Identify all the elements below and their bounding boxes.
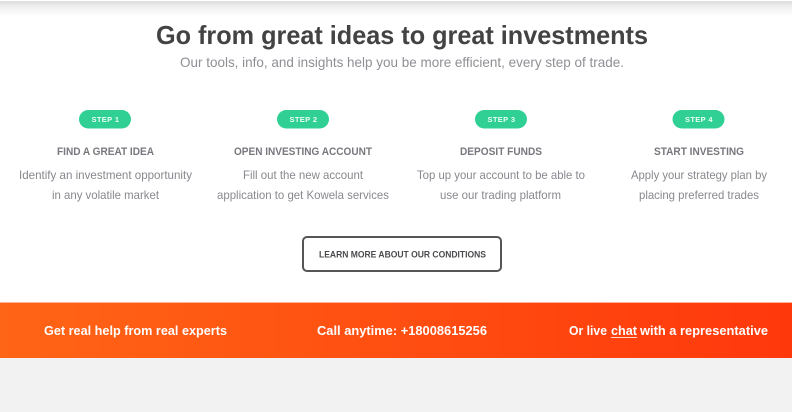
step 1 description: in any volatile market (52, 188, 160, 202)
step 4 description (631, 168, 767, 202)
panel: step 1 (19, 110, 192, 202)
step 3 description (417, 168, 585, 202)
step 4 badge: STEP 4 (685, 115, 713, 124)
step 3 description: use our trading platform (440, 188, 561, 202)
step 3 badge: STEP 3 (488, 115, 515, 124)
step 2 description: application to get Kowela services (217, 188, 389, 202)
step 2 badge (277, 110, 329, 128)
footer background (0, 358, 792, 412)
step 3 description: Top up your account to be able to (417, 168, 585, 182)
step 1 description (19, 168, 192, 202)
banner text: real help: Get real help from real experts (44, 323, 227, 338)
step 2 badge: STEP 2 (290, 115, 317, 124)
subtitle: Our tools, info, and insights help you be more efficient, every step of trade. (180, 54, 624, 70)
step 3 badge (475, 110, 527, 128)
button: learn more (303, 237, 501, 271)
step 1 badge (79, 110, 131, 128)
step 4 description: Apply your strategy plan by (631, 168, 767, 182)
step 2 heading: OPEN INVESTING ACCOUNT (234, 146, 372, 158)
button: learn more: LEARN MORE ABOUT OUR CONDITIONS (319, 250, 486, 260)
step 2 description: Fill out the new account (243, 168, 364, 182)
step 3 heading: DEPOSIT FUNDS (460, 146, 542, 158)
step 2 description (217, 168, 389, 202)
step 1 heading: FIND A GREAT IDEA (57, 146, 154, 158)
step 4 heading: START INVESTING (654, 146, 744, 158)
title: Go from great ideas to great investments (156, 20, 648, 50)
panel: step 4 (631, 110, 767, 202)
banner text: live chat: chat (611, 323, 638, 338)
step 1 badge: STEP 1 (92, 115, 119, 124)
banner text: phone number: Call anytime: +18008615256 (317, 323, 487, 338)
banner text: live chat: with a representative (639, 323, 768, 338)
panel: step 3 (417, 110, 585, 202)
step 4 description: placing preferred trades (639, 188, 759, 202)
contact banner (0, 302, 792, 358)
panel: step 2 (217, 110, 389, 202)
banner text: live chat (569, 323, 768, 338)
step 1 description: Identify an investment opportunity (19, 168, 192, 182)
banner text: live chat: Or live (569, 323, 607, 338)
